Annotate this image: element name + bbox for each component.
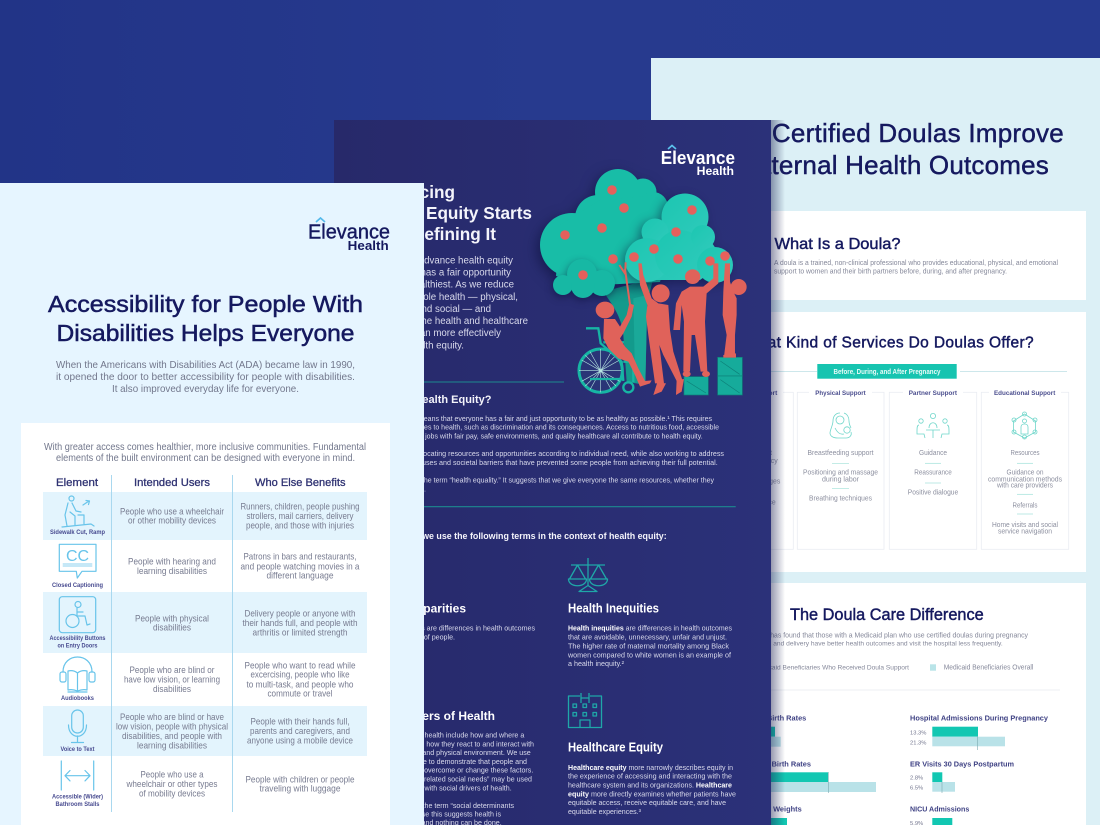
row: sidewalk cut, ramp: people, and those with injuries [246,520,354,530]
row: accessibility buttons: disabilities [153,623,191,633]
row: closed captioning: People with hearing and [128,556,216,566]
row: accessible bathroom stalls: of mobility devices [139,789,205,799]
panel: doula care difference [700,583,1086,825]
bar chart: low birth weights [737,805,802,825]
row: sidewalk cut, ramp: strollers, mail carriers, delivery [246,511,354,521]
panel: accessibility table card [21,423,390,825]
logo: elevance navy: Elevance [308,221,390,243]
card: physical support: Physical Support [815,390,866,397]
panel: what is a doula [700,211,1086,300]
row: sidewalk cut, ramp: or other mobility devices [128,516,216,526]
tall person reaching up [673,263,718,377]
row: voice to text: learning disabilities [137,740,207,750]
panel: what is a doula: What Is a Doula? [774,236,901,253]
term: healthcare equity: Healthcare Equity [568,740,664,755]
row: accessibility buttons: arthritis or limited strength [252,627,348,637]
panel: what is a doula: A doula is a trained, non-clinical professional who provides educational, physical, and emotional [774,260,1058,267]
term: social drivers of health: interchangeably with social drivers of health. [372,784,512,792]
bar chart: er visits postpartum: 6.5% [910,786,923,792]
card: partner support: Partner Support [909,390,958,397]
term: healthcare equity [568,693,736,816]
row: sidewalk cut, ramp: Runners, children, people pushing [240,501,360,511]
panel: health equity document [327,120,785,825]
icon: microphone [68,710,86,742]
row: sidewalk cut, ramp [50,496,360,536]
row: audiobooks: People who are blind or [130,665,214,675]
row: accessible bathroom stalls: wheelchair or other types [126,779,218,789]
panel: what is a doula: support to women and their birth partners before, during, and after pregnancy. [774,268,1007,276]
card: partner support [889,389,977,549]
panel: doula care difference: Research has found that those with a Medicaid plan who use certified doulas during pregnancy [739,632,1029,640]
icon: hospital [568,693,602,728]
row: voice to text: People with their hands full, [250,717,350,727]
crates [684,357,742,395]
icon: wheelchair button [59,597,96,633]
heading: advancing health equity: Advancing [367,182,455,202]
card: physical support: Positioning and massage [803,470,878,477]
tree canopy [540,169,733,298]
chart legend: Medicaid Beneficiaries Who Received Doula Support [754,664,909,672]
card: partner support: Guidance [919,450,947,457]
table header: Intended Users [134,477,210,489]
term: health disparities: Health Disparities [365,602,466,616]
logo: elevance white: Elevance [661,147,735,168]
card: emotional support: Encouragement and guidance [684,500,776,507]
bar chart: nicu admissions: NICU Admissions [910,805,969,814]
row: voice to text: anyone using a mobile device [247,736,353,746]
intro text: so that everyone has a fair opportunity [346,268,511,279]
person in wheelchair [596,262,652,387]
logo: elevance white: Health [697,164,734,178]
card: educational support: Home visits and social [992,522,1058,529]
card: emotional support: throughout pregnancy [711,458,778,465]
card: educational support: Resources [1010,450,1040,457]
term: health disparities: Health disparities are differences in health outcomes [370,625,535,633]
panel: doula document [651,58,1100,825]
card: educational support [981,389,1069,549]
intro paragraph [56,359,355,395]
table header: Element [56,477,98,489]
intro text: advance health equity. [368,340,464,351]
logo: elevance navy: Health [348,239,389,253]
pregnancy timeline pill [817,364,957,379]
row: accessibility buttons: their hands full, and people with [242,618,358,628]
term: social drivers of health: person lives, how they react to and interact with [385,740,534,748]
card: educational support: Guidance on [1006,470,1044,477]
card: physical support: during labor [822,476,860,483]
row: sidewalk cut, ramp: People who use a wheelchair [120,506,224,516]
bar chart: preterm birth rates: Preterm Birth Rates [742,759,811,768]
card: educational support: Educational Support [994,390,1056,397]
card intro text [44,442,366,464]
row: accessibility buttons: People with physical [135,613,209,623]
term: health inequities: Health inequities are differences in health outcomes [568,625,732,633]
bar chart: hospital admissions during pregnancy [910,714,1049,750]
row: sidewalk cut, ramp: Sidewalk Cut, Ramp [50,529,105,536]
standing person with raised arm [638,263,684,395]
bar chart: cesarean birth rates: Cesarean Birth Rates [732,714,806,723]
card: emotional support: Coping with changes [716,478,781,486]
row: accessibility buttons: Delivery people or anyone with [244,608,356,618]
logo: elevance navy [308,218,390,253]
icon: captions [59,544,96,578]
card: physical support: Breathing techniques [809,496,873,503]
term: social drivers of health: their social and physical environment. We use [387,749,531,757]
chart legend: Medicaid Beneficiaries Overall [944,664,1034,672]
row: audiobooks: People who want to read while [244,660,356,670]
icon: captions: CC [66,548,89,565]
term: health inequities: women compared to white women is an example of [567,651,731,659]
card: educational support: Referrals [1012,502,1038,509]
bar chart: hospital admissions during pregnancy: 21.3% [910,740,926,746]
card: partner support: Positive dialogue [908,489,958,496]
term: social drivers of health: of health” because this suggests health is [371,811,501,819]
row: closed captioning: learning disabilities [137,566,207,576]
term: social drivers of health: We do not use the term “social determinants [375,802,514,810]
bar chart: er visits postpartum [910,759,1014,793]
card: emotional support: Emotional Support [718,390,778,397]
intro text: Our goal is to advance health equity [358,255,513,266]
card: partner support: Reassurance [914,469,952,476]
panel: doula services [684,312,1086,572]
panel: doula care difference: The Doula Care Difference [790,606,984,624]
term: health inequities: Health Inequities [568,601,659,616]
section: what is health equity: removing obstacles to health, such as discrimination and its consequences. Access to nutritious food, accessible [371,425,719,432]
term: healthcare equity: equity more directly examines whether patients have [568,790,736,798]
term: social drivers of health [360,709,534,825]
term: health disparities: between groups of people. [371,634,455,642]
card: emotional support: Continuous support [712,450,772,457]
row: audiobooks: disabilities [153,684,191,694]
row: closed captioning: Closed Captioning [52,582,103,589]
row: closed captioning: and people watching movies in a [240,561,360,571]
section: what is health equity: Health equity means that everyone has a fair and just opportunity to be as healthy as possible.¹ This requires [375,416,712,423]
intro paragraph: It also improved everyday life for everyone. [112,383,299,395]
panel: accessibility document [0,183,424,825]
term: healthcare equity: Healthcare equity more narrowly describes equity in [568,764,733,772]
bar chart: cesarean birth rates [732,714,806,747]
icon: ramp [62,496,94,527]
title: Disabilities Helps Everyone [56,320,354,346]
card: educational support: with care providers [996,483,1054,490]
icon: network [1012,412,1037,439]
row: accessibility buttons: on Entry Doors [58,642,98,650]
card intro text: elements of the built environment can be designed with everyone in mind. [56,453,355,464]
row: audiobooks: have low vision, or learning [124,675,220,685]
term: healthcare equity: healthcare system and its organizations. Healthcare [568,781,732,789]
illustration: people reaching for apples on a tree [540,169,747,395]
row: closed captioning: Patrons in bars and restaurants, [244,552,356,562]
row: audiobooks: commute or travel [268,689,332,699]
row: voice to text [60,710,353,753]
apples [560,185,730,280]
tree trunk [603,278,653,385]
section: what is health equity: good jobs with fair pay, safe environments, and quality healthcare all contribute to health equity. [408,434,703,440]
title [48,291,363,346]
heading: doula title: Maternal Health Outcomes [735,150,1049,180]
heading: doula title: How Certified Doulas Improve [712,118,1064,148]
card: physical support [797,389,884,549]
row: accessible bathroom stalls [52,761,354,808]
row: accessible bathroom stalls: Bathroom Stalls [56,801,100,808]
wheelchair [579,328,633,392]
icon: headphones and book [60,657,95,692]
heading: advancing health equity: Health Equity Starts [369,203,532,223]
row: accessible bathroom stalls: People who use a [140,770,204,780]
table header: Who Else Benefits [255,477,346,489]
term: social drivers of health: Social Drivers of Health [360,709,495,723]
card: physical support: Breastfeeding support [808,450,874,457]
card: emotional support [684,389,793,549]
logo: elevance white [661,146,735,178]
term: social drivers of health: Social drivers of health include how and where a [372,732,524,740]
row: accessible bathroom stalls: Accessible (Wider) [52,794,103,800]
bar chart: hospital admissions during pregnancy: Hospital Admissions During Pregnancy [910,714,1049,723]
term: health inequities [567,558,732,668]
subheading: terms: Throughout our work, we use the following terms in the context of health equity: [327,531,667,541]
title: Accessibility for People With [48,291,363,317]
row: accessibility buttons: Accessibility Buttons [50,635,106,642]
term: social drivers of health: this language to demonstrate that people and [385,758,527,766]
pregnancy timeline pill: Before, During, and After Pregnancy [834,369,941,376]
term: health inequities: a health inequity.² [568,660,625,668]
section: what is health equity: need them or not. [371,486,426,494]
section: what is health equity [371,394,724,494]
intro text: behavioral, and social — and [366,304,491,315]
row: closed captioning [52,544,360,589]
row: audiobooks: to multi-task, and people who [246,679,354,689]
row: voice to text: People who are blind or have [120,712,224,722]
row: audiobooks [60,657,356,702]
icon: mother and baby [830,413,851,438]
row: voice to text: disabilities, and people with [122,731,222,741]
intro text [346,255,528,351]
term: social drivers of health: communities can overcome or change these factors. [369,767,533,775]
bar chart: low birth weights: Low Birth Weights [737,805,802,814]
person on crates [723,263,747,358]
term: health inequities: that are avoidable, unnecessary, unfair and unjust. [568,634,727,642]
icon: meeting [917,413,949,438]
panel: doula care difference: and delivery have better health outcomes and visit the hospital less frequently. [773,640,1003,648]
term: healthcare equity: the experience of accessing and interacting with the [568,773,732,781]
row: voice to text: Voice to Text [60,746,95,753]
intro text: to be their healthiest. As we reduce [363,280,514,291]
heading: advancing health equity: by Defining It [387,224,496,244]
term: health inequities: The higher rate of maternal mortality among Black [568,642,729,650]
row: audiobooks: excercising, people who like [250,670,350,680]
term: social drivers of health: The term “health-related social needs” may be used [370,776,532,784]
card intro text: With greater access comes healthier, more inclusive communities. Fundamental [44,442,366,453]
icon: width arrow [61,761,94,790]
intro paragraph: When the Americans with Disabilities Act (ADA) became law in 1990, [56,359,355,371]
chart legend [754,664,1034,672]
heading: advancing health equity [367,182,532,244]
term: healthcare equity: equitable experiences.³ [568,808,642,816]
section: what is health equity: the root causes and societal barriers that have prevented some people from achieving their full potential. [388,459,718,467]
bar chart: er visits postpartum: ER Visits 30 Days Postpartum [910,759,1014,768]
bar chart: preterm birth rates [742,759,876,793]
term: health disparities [365,602,535,642]
bar chart: er visits postpartum: 2.8% [910,776,923,782]
term: healthcare equity: equitable access, receive equitable care, and have [568,799,726,807]
card: educational support: service navigation [998,529,1052,536]
row: closed captioning: different language [266,571,334,581]
icon: scales [568,558,608,592]
intro text: work to close the health and healthcare [358,316,528,327]
panel: doula services: What Kind of Services Do Doulas Offer? [744,335,1034,352]
table header [56,477,346,489]
intro text: barriers to whole health — physical, [365,292,518,303]
section: what is health equity: It involves allocating resources and opportunities according to individual need, while also working to address [382,450,724,458]
bar chart: nicu admissions [910,805,969,825]
bar chart: hospital admissions during pregnancy: 13.3% [910,730,926,736]
heading: doula title [712,118,1064,180]
section: what is health equity: What Is Health Equity? [372,394,492,406]
row: accessible bathroom stalls: traveling with luggage [260,784,340,794]
card: educational support: communication methods [988,476,1063,483]
row: accessibility buttons [50,597,358,650]
section: what is health equity: We do not use the term “health equality.” It suggests that we give everyone the same resources, whether they [375,478,714,485]
intro text: gaps, we can more effectively [374,328,501,339]
row: voice to text: parents and caregivers, and [250,726,350,736]
row: voice to text: low vision, people with physical [116,721,228,731]
row: accessible bathroom stalls: People with children or people [246,774,354,784]
row: audiobooks: Audiobooks [61,695,94,702]
intro paragraph: it opened the door to better accessibility for people with disabilities. [56,371,355,383]
